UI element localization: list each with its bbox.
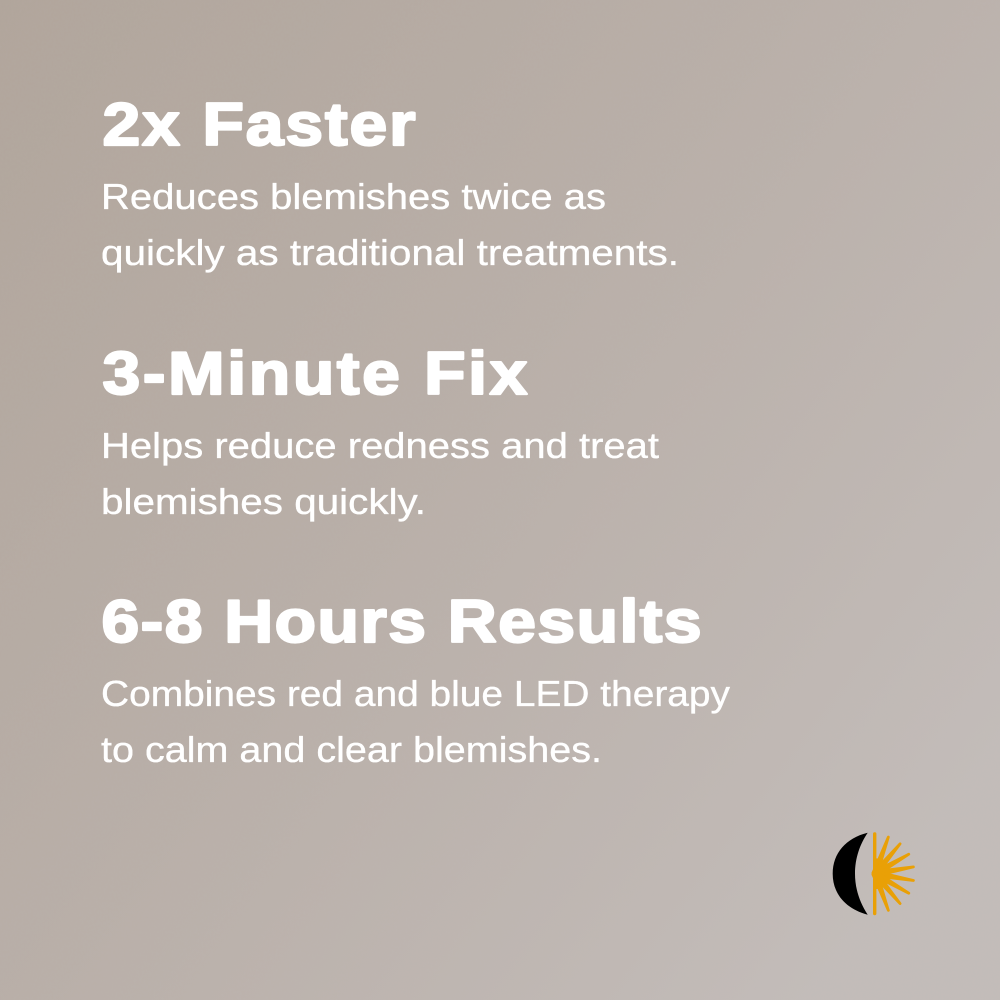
icon: orange half sun [873,834,914,914]
heading: 2x Faster: 2x Faster [102,91,416,158]
icon: crescent moon and sun logo [833,833,914,915]
heading: 3-Minute Fix: 3-Minute Fix [102,340,528,407]
block: 6-8 Hours Results [101,588,731,770]
text: helps reduce redness description: blemishes quickly. [101,481,426,522]
text: reduces blemishes description [101,176,679,273]
text: helps reduce redness description [101,425,659,522]
block: 2x Faster [101,91,679,273]
text: helps reduce redness description: Helps reduce redness and treat [101,425,659,466]
heading: 6-8 Hours Results: 6-8 Hours Results [102,588,702,655]
text: combines red and blue LED description: Combines red and blue LED therapy [101,673,731,714]
icon: black crescent moon [833,833,868,915]
block: 3-Minute Fix [101,340,659,522]
text: reduces blemishes description: Reduces blemishes twice as [101,176,606,217]
text: combines red and blue LED description [101,673,731,770]
text: reduces blemishes description: quickly as traditional treatments. [101,232,679,273]
text: combines red and blue LED description: to calm and clear blemishes. [101,729,602,770]
